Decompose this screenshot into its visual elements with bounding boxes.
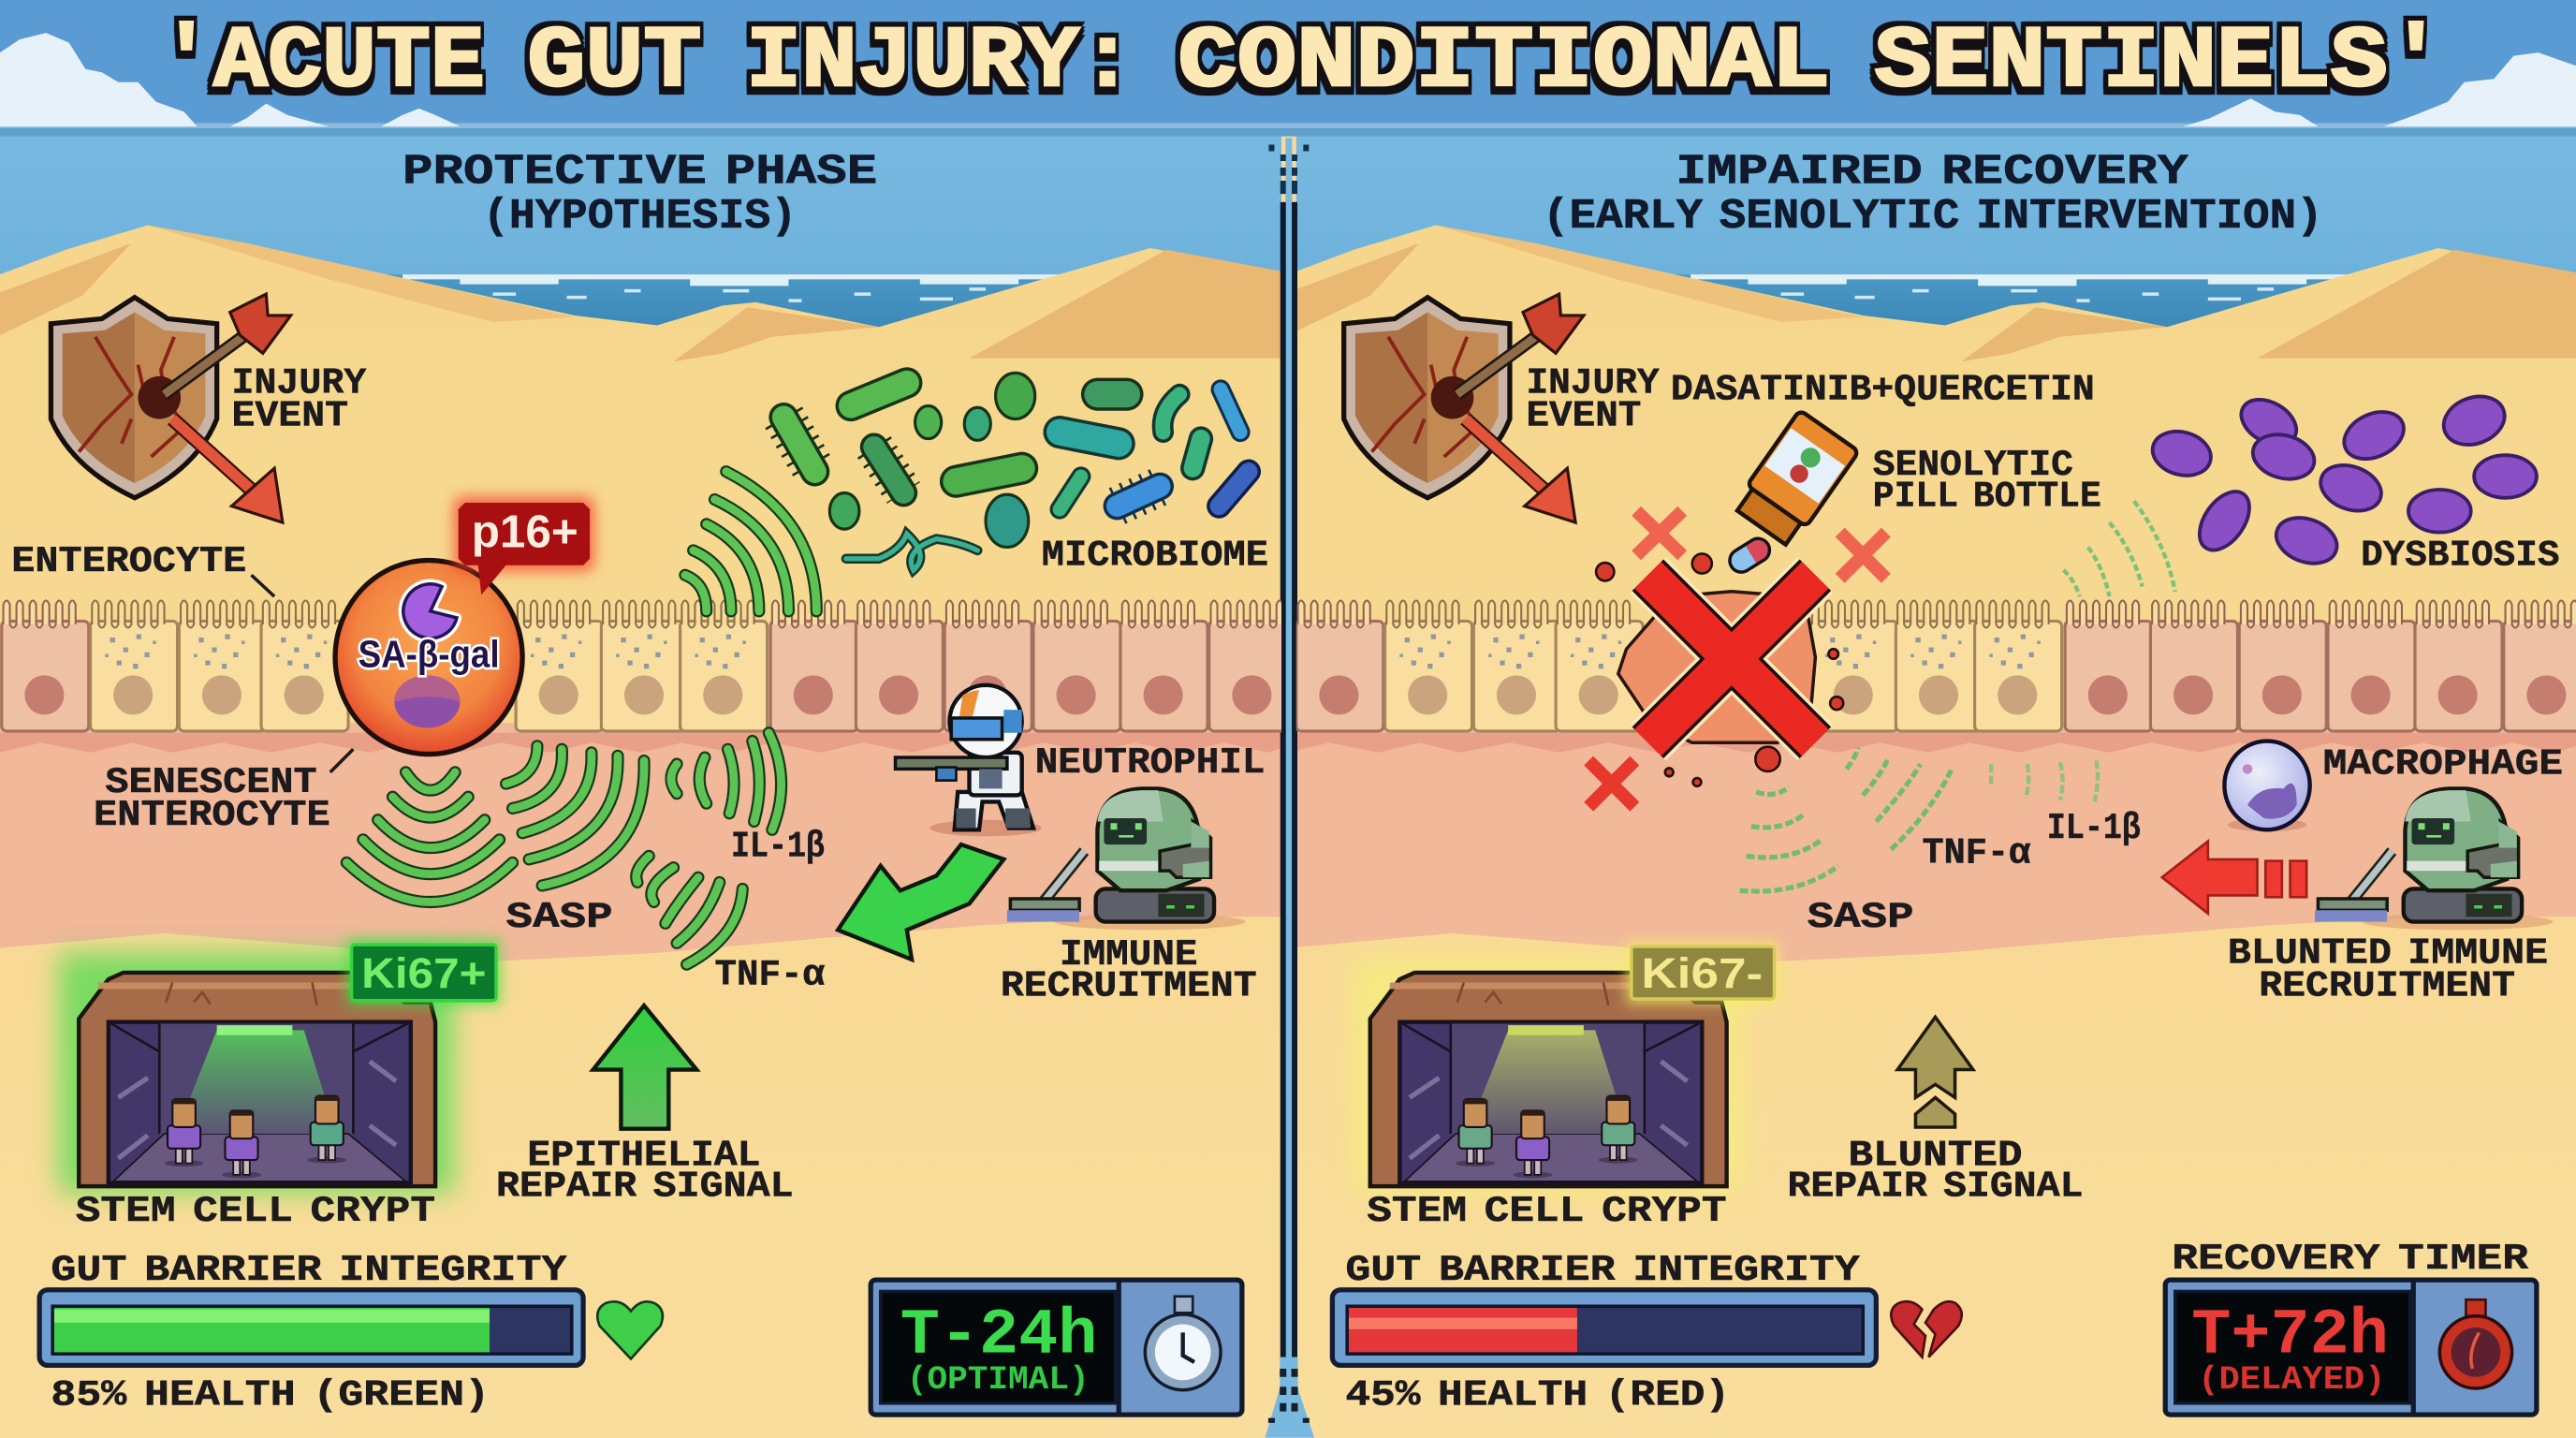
SASP arcs	[346, 746, 644, 902]
timer: T-24h	[871, 1280, 1242, 1415]
enterocyte layer	[2, 600, 1296, 731]
timer: T-24h: (OPTIMAL)	[907, 1361, 1090, 1399]
timer: T+72h: T+72h	[2191, 1299, 2389, 1372]
label: immune recruitment	[1001, 934, 1257, 1007]
label: stem cell crypt: STEM CELL CRYPT	[76, 1191, 435, 1232]
label: blunted immune recruitment	[2228, 932, 2548, 1007]
senescent enterocyte cell	[335, 560, 522, 755]
label: microbiome: MICROBIOME	[1042, 536, 1268, 577]
icon: broken heart	[1891, 1301, 1962, 1357]
heading: impaired recovery: (EARLY SENOLYTIC INTERVENTION)	[1543, 192, 2323, 241]
label: dasatinib + quercetin: DASATINIB+QUERCETIN	[1671, 369, 2095, 410]
label: IL-1β: IL-1β	[731, 826, 825, 867]
badge: Ki67-: Ki67-	[1641, 949, 1763, 997]
glow: crypt	[1354, 960, 1741, 1193]
label: senescent enterocyte: SENESCENT	[105, 762, 317, 803]
timer: T+72h	[2165, 1280, 2537, 1415]
faded IL-1β and TNF-α arcs	[1991, 761, 2098, 801]
glow: crypt	[59, 953, 453, 1193]
icon: stopwatch	[1145, 1297, 1221, 1390]
label: senolytic pill bottle	[1873, 445, 2101, 518]
faded SASP arcs	[1740, 748, 1952, 891]
stem cell crypt	[79, 973, 435, 1186]
badge: Ki67+	[346, 938, 501, 1005]
icon: senolytic pill bottle	[1732, 410, 1859, 549]
red debris dots	[1596, 553, 1843, 786]
label: senescent enterocyte: ENTEROCYTE	[94, 795, 330, 836]
label: injury event: INJURY	[1526, 362, 1660, 404]
title: CONDITIONAL	[1178, 13, 1830, 111]
health bar: gut barrier integrity: GUT BARRIER INTEGRITY	[51, 1250, 567, 1291]
macrophage orb	[2224, 741, 2310, 831]
label: recovery timer: RECOVERY TIMER	[2172, 1239, 2529, 1280]
clouds left	[0, 33, 460, 126]
label: epithelial repair signal: EPITHELIAL	[527, 1135, 761, 1176]
divider	[1265, 138, 1314, 1438]
label: senolytic pill bottle: SENOLYTIC	[1873, 445, 2073, 486]
label: injury event: EVENT	[1526, 396, 1641, 437]
title: SENTINELS'	[1875, 13, 2445, 111]
title	[159, 13, 2445, 111]
label: enterocyte	[11, 541, 274, 596]
background: impaired recovery scene	[1295, 137, 2576, 961]
icon: red stopwatch	[2439, 1299, 2512, 1388]
label: blunted immune recruitment: BLUNTED IMMUNE	[2228, 932, 2548, 974]
badge: p16+: p16+	[472, 506, 578, 557]
icon: green heart	[597, 1301, 663, 1358]
timer: T+72h: (DELAYED)	[2198, 1361, 2385, 1399]
label: senescent enterocyte	[94, 749, 353, 836]
clouds right	[2184, 52, 2576, 126]
icon: broken shield with arrow	[1344, 294, 1584, 522]
label: macrophage: MACROPHAGE	[2323, 744, 2563, 785]
badge: p16+	[453, 496, 594, 594]
label: blunted repair signal: BLUNTED	[1848, 1135, 2023, 1176]
small red x marks	[1588, 511, 1886, 807]
health bar: gut barrier integrity: GUT BARRIER INTEGRITY	[1345, 1250, 1861, 1291]
neutrophil soldier	[896, 685, 1042, 836]
label: epithelial repair signal	[496, 1135, 794, 1208]
heading: protective phase: (HYPOTHESIS)	[483, 192, 797, 241]
heading: protective phase: PROTECTIVE PHASE	[402, 148, 877, 197]
label: blunted immune recruitment: RECRUITMENT	[2259, 966, 2515, 1007]
TNF-α arcs	[637, 856, 742, 964]
robot: immune sweeper	[1007, 788, 1245, 930]
health bar: gut barrier integrity	[39, 1250, 583, 1416]
icon: pill	[1725, 535, 1774, 577]
label: injury event: INJURY	[231, 362, 367, 404]
health bar: gut barrier integrity: 85% HEALTH (GREEN)	[51, 1375, 490, 1416]
label: injury event	[1526, 362, 1660, 437]
label: epithelial repair signal: REPAIR SIGNAL	[496, 1167, 794, 1208]
title: 'ACUTE	[159, 13, 485, 111]
label: enterocyte: ENTEROCYTE	[11, 541, 246, 582]
dysbiosis purple bacteria	[2147, 389, 2537, 571]
panel: impaired recovery	[1296, 148, 2576, 1416]
label: immune recruitment: IMMUNE	[1060, 934, 1197, 976]
stem cell crypt	[1370, 973, 1727, 1186]
microbiome bacteria cluster	[783, 383, 1249, 570]
label: senolytic pill bottle: PILL BOTTLE	[1873, 477, 2101, 518]
arrow: epithelial repair	[593, 1005, 696, 1129]
arrow: blunted repair stub	[1915, 1097, 1955, 1127]
senescent enterocyte cell: SA-β-gal	[359, 633, 500, 676]
label: immune recruitment: RECRUITMENT	[1001, 966, 1257, 1007]
arrow: blunted immune recruitment	[2162, 842, 2306, 914]
heading: protective phase	[402, 148, 877, 241]
heading: impaired recovery: IMPAIRED RECOVERY	[1676, 148, 2189, 197]
label: injury event	[231, 362, 367, 437]
label: TNF-α: TNF-α	[714, 954, 826, 995]
label: SASP: SASP	[506, 897, 613, 938]
label: SASP: SASP	[1808, 897, 1914, 938]
enterocyte layer	[1296, 600, 2576, 731]
background: protective phase scene	[0, 137, 1281, 961]
label: blunted repair signal	[1788, 1135, 2083, 1208]
badge: Ki67+: Ki67+	[361, 949, 487, 997]
arrow: immune recruitment	[838, 844, 1003, 960]
label: stem cell crypt: STEM CELL CRYPT	[1367, 1191, 1727, 1232]
icon: broken shield with arrow	[51, 294, 291, 522]
label: injury event: EVENT	[231, 396, 348, 437]
panel: protective phase	[2, 148, 1296, 1416]
faded signal arcs toward dysbiosis	[2063, 501, 2175, 596]
IL-1β arcs	[671, 733, 782, 829]
health bar: gut barrier integrity: 45% HEALTH (RED)	[1345, 1375, 1730, 1416]
arrow: blunted repair	[1897, 1017, 1973, 1097]
robot: blunted immune sweeper	[2315, 788, 2553, 930]
label: dysbiosis: DYSBIOSIS	[2361, 536, 2559, 577]
microbiome round cocci	[829, 373, 1035, 547]
dead senescent cell with large red X	[1618, 575, 1815, 742]
label: blunted repair signal: REPAIR SIGNAL	[1788, 1167, 2083, 1208]
header band	[0, 0, 2576, 137]
timer: T-24h: T-24h	[900, 1299, 1097, 1372]
label: TNF-α: TNF-α	[1922, 832, 2031, 873]
title: GUT	[527, 13, 701, 111]
label: neutrophil: NEUTROPHIL	[1035, 742, 1265, 784]
title: INJURY:	[746, 13, 1135, 111]
badge: Ki67-	[1627, 942, 1779, 1004]
heading: impaired recovery	[1543, 148, 2323, 241]
signal arcs toward microbiome	[685, 472, 816, 611]
label: IL-1β: IL-1β	[2047, 808, 2141, 849]
health bar: gut barrier integrity	[1332, 1250, 1876, 1416]
